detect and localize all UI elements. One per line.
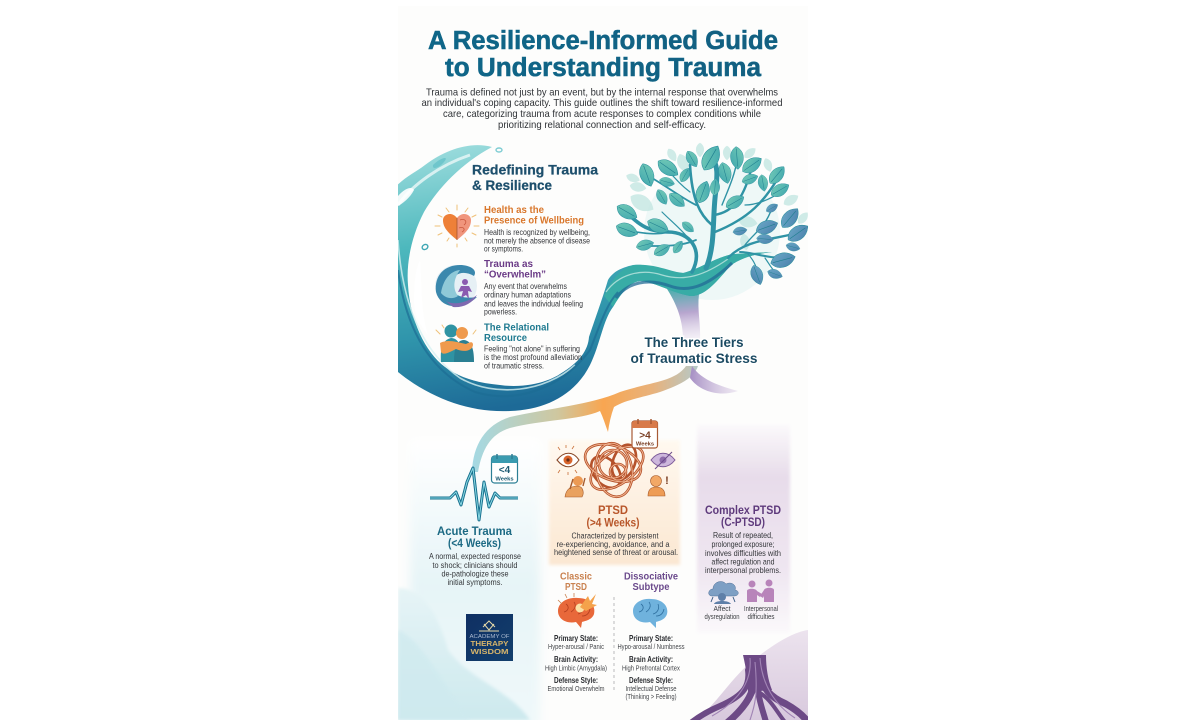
title: to Understanding Trauma (445, 54, 762, 82)
icon: calendar under 4 weeks: <4 (499, 465, 511, 476)
section: relational resource: Resource (484, 332, 527, 344)
tree blue leaves (732, 201, 812, 287)
classic PTSD column: Classic (560, 572, 592, 582)
complex PTSD text: Result of repeated, (713, 530, 773, 540)
section: trauma as overwhelm: ordinary human adaptations (484, 290, 571, 300)
icon: calendar under 4 weeks (492, 454, 518, 483)
classic PTSD details (545, 634, 607, 693)
classic PTSD details: Primary State: (554, 634, 598, 643)
PTSD text: (>4 Weeks) (586, 518, 640, 530)
section: trauma as overwhelm (484, 258, 583, 316)
section: trauma as overwhelm: “Overwhelm” (484, 268, 546, 280)
tree branch descending to tiers (666, 288, 700, 339)
classic PTSD details: Emotional Overwhelm (548, 686, 605, 693)
intro text: Trauma is defined not just by an event, but by the internal response that overwhelms (426, 88, 778, 98)
section: trauma as overwhelm: powerless. (484, 306, 517, 316)
section: health as wellbeing: or symptoms. (484, 244, 523, 254)
dissociative details: Defense Style: (629, 676, 673, 685)
dissociative details (618, 634, 685, 701)
classic PTSD details: Defense Style: (554, 676, 598, 685)
acute trauma text: initial symptoms. (448, 577, 502, 587)
heading: three tiers (630, 335, 758, 366)
dissociative details: High Prefrontal Cortex (622, 666, 680, 672)
intro text (422, 88, 783, 131)
panel: acute trauma background (398, 501, 542, 720)
acute trauma text: (<4 Weeks) (448, 538, 501, 550)
intro text: prioritizing relational connection and self-efficacy. (498, 120, 706, 131)
dissociative subtype column: Dissociative (624, 572, 678, 582)
acute trauma text: A normal, expected response (429, 551, 521, 561)
section: trauma as overwhelm: Any event that overwhelms (484, 281, 567, 291)
icon: two people hugging (436, 324, 476, 362)
complex PTSD text: affect regulation and (712, 556, 775, 566)
dissociative subtype column: Subtype (632, 582, 670, 593)
heading: redefining trauma (472, 162, 598, 193)
PTSD text: PTSD (598, 505, 628, 517)
heading: redefining trauma: Redefining Trauma (472, 162, 598, 178)
complex PTSD text (705, 505, 781, 575)
PTSD text: Characterized by persistent (572, 530, 659, 540)
tree (614, 142, 812, 287)
section: health as wellbeing: Health as the (484, 204, 544, 216)
acute trauma text: de-pathologize these (442, 568, 509, 578)
section: health as wellbeing: Presence of Wellbeing (484, 214, 584, 226)
icon: crossed-out eye (651, 452, 675, 469)
heading: three tiers: of Traumatic Stress (630, 351, 758, 366)
title: A Resilience-Informed Guide (428, 27, 778, 55)
icon: two people apart (747, 580, 774, 602)
complex PTSD text: prolonged exposure; (712, 539, 774, 549)
complex PTSD text: involves difficulties with (705, 548, 781, 558)
branching path to three tiers (472, 366, 738, 472)
acute trauma text: to shock; clinicians should (432, 560, 518, 570)
acute trauma text (429, 526, 521, 587)
icon: calendar over 4 weeks (632, 419, 658, 448)
section: relational resource: of traumatic stress. (484, 360, 544, 370)
heading: redefining trauma: & Resilience (472, 178, 552, 193)
intro text: an individual's coping capacity. This guide outlines the shift toward resilience-informed (422, 98, 783, 109)
icon: wave and figure (435, 265, 477, 307)
PTSD text: heightened sense of threat or arousal. (554, 547, 678, 557)
icon: classic brain (558, 593, 597, 628)
divider (613, 597, 615, 692)
icon: calendar over 4 weeks: >4 (639, 430, 651, 442)
complex PTSD icon labels: Affect (714, 604, 730, 613)
section: relational resource: Feeling "not alone" in suffering (484, 344, 580, 354)
panel: complex PTSD background (697, 425, 790, 633)
icon: alert person: ! (665, 475, 669, 487)
classic PTSD details: High Limbic (Amygdala) (545, 666, 607, 672)
roots (692, 630, 808, 720)
tree teal leaves (614, 142, 792, 259)
section: trauma as overwhelm: and leaves the individual feeling (484, 298, 583, 308)
complex PTSD text: Complex PTSD (705, 505, 781, 517)
icon: person in distress (565, 476, 585, 497)
classic PTSD column: PTSD (565, 582, 587, 593)
dissociative details: Primary State: (629, 634, 673, 643)
title (428, 27, 778, 82)
icon: heart and brain (435, 205, 479, 247)
complex PTSD text: interpersonal problems. (705, 565, 781, 575)
complex PTSD text: (C-PTSD) (721, 517, 765, 529)
tree pale leaves (625, 143, 811, 251)
icon: storm cloud over person (709, 582, 738, 604)
icon: tangled knot (580, 437, 651, 500)
icon: calendar under 4 weeks: Weeks (495, 476, 514, 482)
logo: THERAPY (470, 639, 509, 648)
logo: ACADEMY OF (470, 634, 510, 640)
dissociative details: Hypo-arousal / Numbness (618, 644, 685, 651)
section: health as wellbeing (484, 204, 590, 254)
complex PTSD icon labels: difficulties (748, 612, 775, 621)
dissociative details: Brain Activity: (629, 655, 673, 664)
icon: alert person (648, 475, 669, 496)
section: trauma as overwhelm: Trauma as (484, 258, 533, 270)
complex PTSD icon labels: Interpersonal (744, 604, 778, 613)
flowing wave and tree trunk (380, 145, 772, 411)
icon: dissociative brain (633, 599, 667, 628)
section: relational resource: is the most profound alleviation (484, 352, 582, 362)
heading: three tiers: The Three Tiers (644, 335, 744, 350)
complex PTSD icon labels (704, 604, 778, 621)
classic PTSD details: Hyper-arousal / Panic (548, 644, 604, 651)
dissociative subtype column (618, 572, 685, 701)
dissociative details: Intellectual Defense (626, 686, 677, 693)
page background (398, 6, 808, 720)
section: relational resource: The Relational (484, 322, 549, 334)
PTSD text: re-experiencing, avoidance, and a (556, 539, 670, 549)
icon: calendar over 4 weeks: Weeks (636, 442, 654, 448)
intro text: care, categorizing trauma from acute responses to complex conditions while (443, 109, 761, 120)
section: health as wellbeing: not merely the absence of disease (484, 236, 590, 246)
pale tree halo (644, 164, 780, 300)
icon: watchful eye (557, 445, 579, 475)
complex PTSD icon labels: dysregulation (704, 612, 740, 621)
panel: PTSD background (549, 440, 680, 565)
icon: acute pulse (430, 468, 518, 520)
classic PTSD column (545, 572, 607, 693)
dissociative details: (Thinking > Feeling) (626, 694, 676, 701)
PTSD text (554, 505, 678, 557)
logo: WISDOM (470, 647, 508, 656)
classic PTSD details: Brain Activity: (554, 655, 598, 664)
tree branches (631, 162, 789, 274)
section: health as wellbeing: Health is recognized by wellbeing, (484, 227, 590, 237)
acute trauma text: Acute Trauma (437, 526, 513, 538)
section: relational resource (484, 322, 582, 370)
logo (466, 614, 513, 661)
